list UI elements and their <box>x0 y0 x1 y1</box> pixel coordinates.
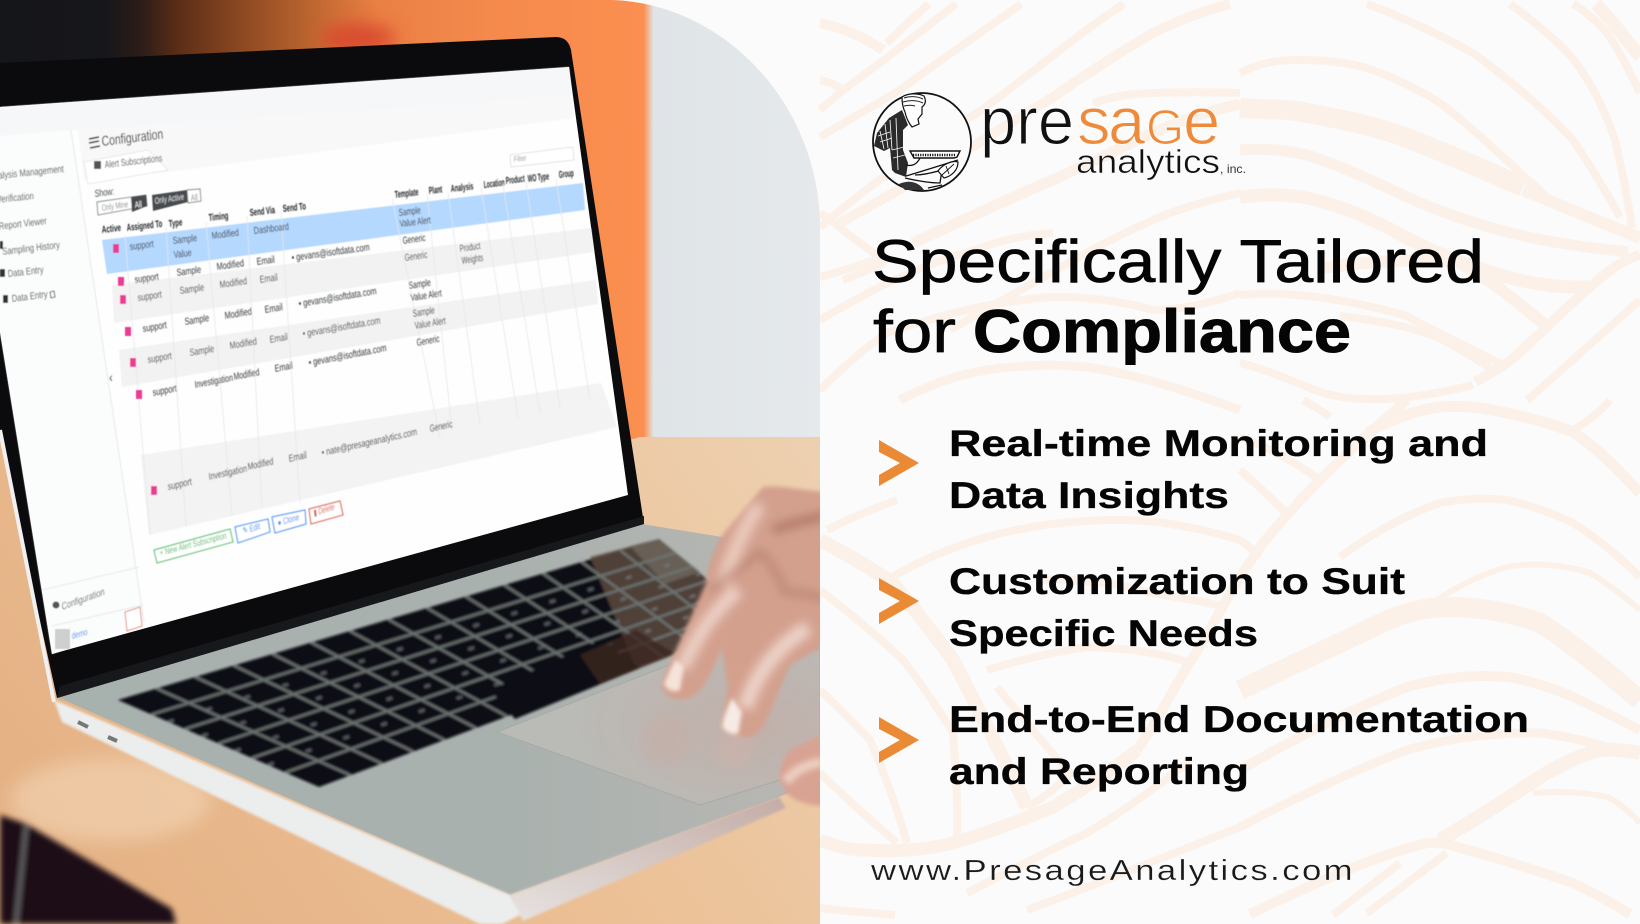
table row 5: Modified <box>229 335 257 351</box>
table row 1: Dashboard <box>253 220 290 236</box>
table row 6: Email <box>274 359 293 374</box>
table row 6: Modified <box>233 366 260 382</box>
show toggles: All <box>134 199 142 210</box>
title: Compliance <box>973 298 1351 365</box>
logo wordmark: e <box>1183 84 1220 159</box>
logo emblem <box>873 93 971 191</box>
table row 7: Investigation <box>208 462 247 482</box>
table row 7: Generic <box>429 418 454 434</box>
table row 3: Sample <box>179 281 205 296</box>
table row 3: Generic <box>404 248 429 263</box>
show toggles: Show: <box>94 185 115 199</box>
table row 2: Sample <box>176 263 202 278</box>
tab band <box>88 130 164 162</box>
logo wordmark: s <box>1077 84 1110 159</box>
table header: Timing <box>208 210 229 223</box>
table row 4: support <box>142 319 168 334</box>
sidebar navigation: Sampling History <box>2 239 61 257</box>
red blurred spot <box>320 24 396 52</box>
button: clone <box>272 510 306 533</box>
table row 7: • nate@presageanalytics.com <box>321 426 418 458</box>
table sidebar toggle: ‹ <box>109 370 113 385</box>
table row 3: Weights <box>461 251 484 266</box>
configuration heading: Configuration <box>101 126 164 149</box>
button: edit <box>235 519 270 543</box>
keyboard <box>118 539 758 787</box>
bullet 2 <box>879 561 1405 654</box>
show toggles: Only Active <box>154 191 184 206</box>
show toggles <box>94 185 201 215</box>
show toggles: All <box>190 192 198 203</box>
screen UI content <box>0 67 617 654</box>
bullet 1 <box>879 423 1488 516</box>
table row 3: Product <box>459 239 481 254</box>
table row 7: Email <box>288 449 307 464</box>
table header: Plant <box>428 184 443 196</box>
bullet 2 text: Customization to Suit <box>949 561 1405 602</box>
sidebar navigation: Data Entry <box>7 264 44 279</box>
laptop deck <box>57 524 820 895</box>
table row 7 <box>151 418 454 495</box>
table row 4: Sample <box>408 276 431 291</box>
bullet 3 text <box>949 699 1529 792</box>
logo wordmark: pre <box>980 84 1074 159</box>
table row 5: Sample <box>189 343 215 358</box>
table row 4: Modified <box>224 305 252 321</box>
top bar <box>0 67 572 136</box>
back of hand and fingers <box>662 487 825 737</box>
table row 4: Value Alert <box>410 287 443 303</box>
sidebar footer: demo <box>71 626 88 641</box>
table row 3: Modified <box>219 275 248 290</box>
sidebar navigation <box>0 163 65 304</box>
table row 2: Modified <box>216 257 245 272</box>
table row 1: Value <box>173 247 192 260</box>
icon: chevron <box>879 717 919 763</box>
table row 3 <box>120 239 484 304</box>
table header: Analysis <box>450 181 474 194</box>
table header: Template <box>394 187 419 200</box>
filter box: Filter <box>514 155 527 164</box>
hand <box>662 487 825 806</box>
bullet 2 text: Specific Needs <box>949 613 1258 654</box>
table row 2: support <box>134 270 160 285</box>
table header: Assigned To <box>126 218 163 233</box>
table header: Location <box>483 177 505 191</box>
laptop lid and bezel <box>0 37 644 702</box>
title: for <box>873 298 956 365</box>
table row 1: Sample <box>398 204 421 218</box>
table header: Send Via <box>249 205 276 218</box>
table header: Active <box>101 221 122 235</box>
logo wordmark: a <box>1108 84 1146 159</box>
table header <box>101 167 574 235</box>
sidebar footer: Configuration <box>61 586 105 612</box>
table row 6: • gevans@isoftdata.com <box>308 342 387 368</box>
table row 6 <box>136 332 441 399</box>
table row 5: support <box>147 350 173 365</box>
table row backgrounds <box>102 183 617 535</box>
logo wordmark: analytics <box>1076 143 1220 180</box>
table row 5: • gevans@isoftdata.com <box>302 314 381 339</box>
table header: Send To <box>282 201 306 214</box>
table row 6: Generic <box>416 332 441 348</box>
bullet 3 text: End-to-End Documentation <box>949 699 1529 740</box>
table row 1: Value Alert <box>399 214 432 229</box>
sidebar <box>0 130 144 654</box>
table header: Type <box>168 217 183 229</box>
wall background <box>0 0 820 450</box>
bullet 1 text <box>949 423 1488 516</box>
table header: WO Type <box>527 171 550 185</box>
table row 4 <box>125 276 443 336</box>
show toggles: Only Mine <box>101 199 128 213</box>
configuration heading <box>89 126 164 170</box>
table row 6: support <box>152 382 178 398</box>
logo wordmark: , inc. <box>1220 162 1246 176</box>
laptop front edge <box>54 700 786 924</box>
table row 5 <box>130 304 447 367</box>
bullet 3 <box>879 699 1529 792</box>
icon: chevron <box>879 440 919 486</box>
table row 4: Email <box>264 301 283 315</box>
button: delete <box>309 501 343 524</box>
table row 1: support <box>129 238 155 252</box>
desk light patch <box>10 758 210 842</box>
table row 2: Generic <box>402 231 427 246</box>
fingernails <box>664 660 742 734</box>
table row 3: support <box>137 288 163 303</box>
sidebar footer <box>52 586 142 649</box>
bullet 3 text: and Reporting <box>949 751 1249 792</box>
table row 5: Value Alert <box>414 314 447 331</box>
bullet 1 text: Data Insights <box>949 475 1229 516</box>
finger highlights and creases <box>682 505 825 708</box>
laptop screen <box>0 67 628 654</box>
table row 2: • gevans@isoftdata.com <box>291 241 370 263</box>
logo wordmark <box>980 84 1246 180</box>
button: delete: ▮ Delete <box>313 501 335 518</box>
photo: laptop on a desk <box>0 0 825 924</box>
table row 4: Sample <box>184 312 210 327</box>
table header: Product <box>505 173 525 187</box>
table row 5: Email <box>269 331 288 345</box>
filter box <box>510 147 574 167</box>
wooden desk <box>0 420 820 924</box>
table row 6: Investigation <box>194 371 233 390</box>
button: clone: ● Clone <box>277 512 300 528</box>
table row 1: Modified <box>211 226 240 241</box>
table row 3: Email <box>259 271 278 285</box>
logo wordmark: G <box>1146 101 1184 155</box>
trackpad <box>499 649 820 806</box>
table row 2: Email <box>256 253 275 267</box>
sidebar navigation: Data Entry <box>11 288 48 304</box>
table row 7: Modified <box>247 455 274 472</box>
button: edit: ✎ Edit <box>242 521 261 536</box>
bullet 1 text: Real-time Monitoring and <box>949 423 1488 464</box>
configuration heading: Alert Subscriptions <box>104 152 163 170</box>
table row 1: Sample <box>172 232 198 246</box>
table row 5: Sample <box>412 304 435 319</box>
thumb <box>779 733 825 806</box>
title: Specifically Tailored <box>872 228 1484 295</box>
table grid lines <box>125 179 590 535</box>
button: new alert subscription: + New Alert Subscription <box>159 530 227 558</box>
dark object on floor <box>0 815 176 924</box>
table row 2 <box>118 231 427 286</box>
website url: www.PresageAnalytics.com <box>870 855 1355 887</box>
icon: chevron <box>879 578 919 624</box>
title <box>872 228 1484 365</box>
table row 4: • gevans@isoftdata.com <box>298 285 377 309</box>
table row 7: support <box>167 475 193 492</box>
table header: Group <box>558 167 574 181</box>
bullet 2 text <box>949 561 1405 654</box>
table row 1 <box>113 204 432 260</box>
logo: Presage Analytics <box>873 84 1246 191</box>
